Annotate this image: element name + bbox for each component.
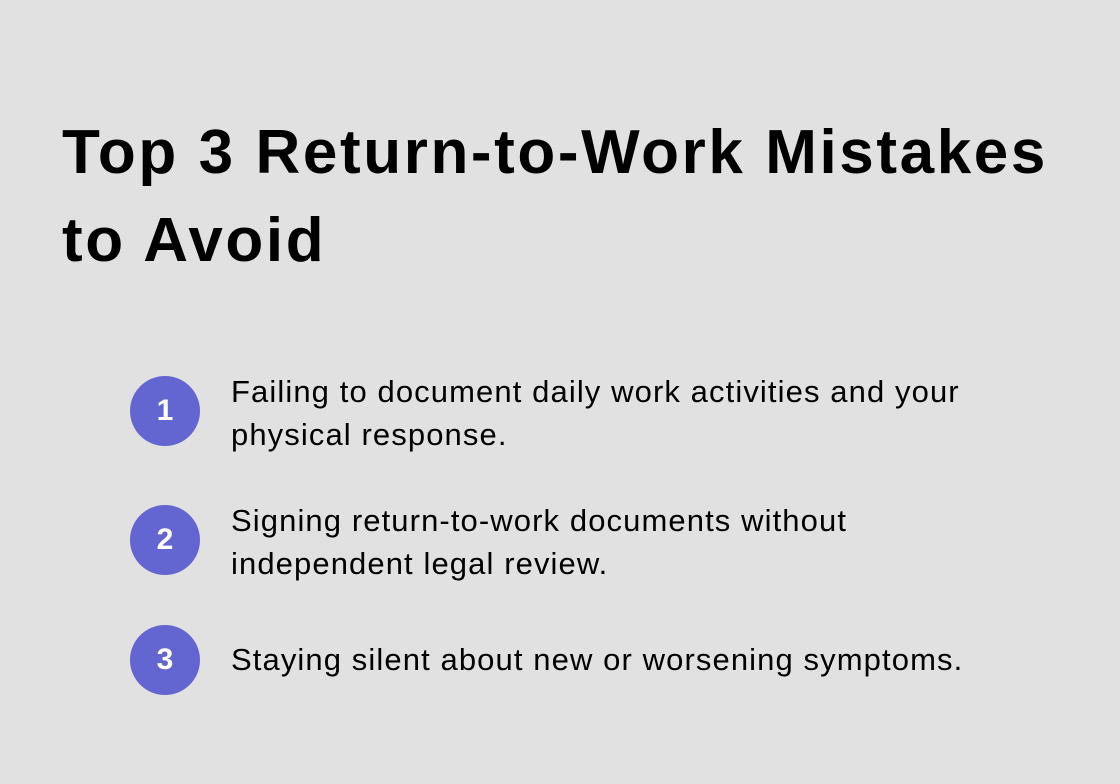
text 1 [231, 374, 960, 452]
text 3: Staying silent about new or worsening symptoms. [231, 642, 963, 677]
icon: number 3: 3 [157, 643, 173, 676]
title: to Avoid [62, 206, 326, 275]
item 3 [130, 625, 963, 695]
icon: number 1 [130, 376, 200, 446]
item 1 [130, 374, 960, 452]
title: Top 3 Return-to-Work Mistakes [62, 118, 1048, 187]
icon: number 2 [130, 505, 200, 575]
icon: number 3 [130, 625, 200, 695]
text 2 [231, 503, 847, 581]
icon: number 2: 2 [157, 523, 173, 556]
text 1: physical response. [231, 417, 508, 452]
title [62, 118, 1048, 275]
item 2 [130, 503, 847, 581]
text 1: Failing to document daily work activities and your [231, 374, 960, 409]
icon: number 1: 1 [157, 394, 173, 427]
text 2: independent legal review. [231, 546, 608, 581]
text 2: Signing return-to-work documents without [231, 503, 847, 538]
